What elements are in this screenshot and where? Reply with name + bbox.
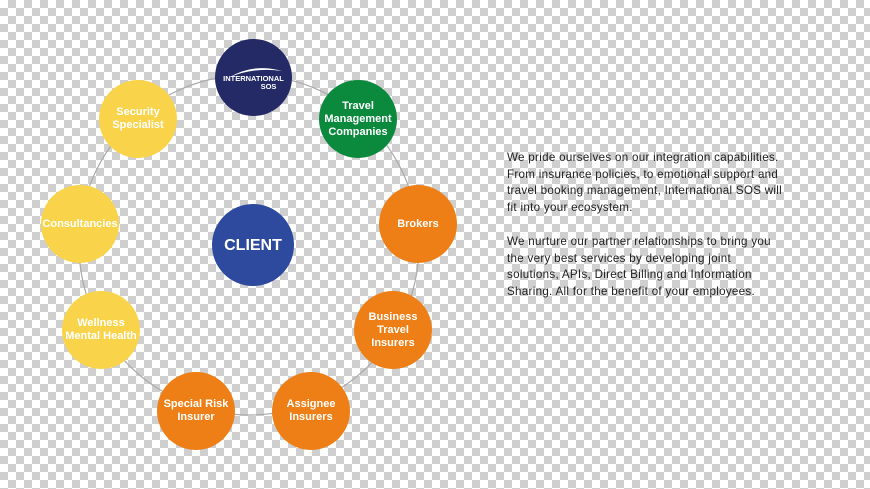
node: Security Specialist bbox=[99, 80, 177, 158]
node: Assignee Insurers: Assignee bbox=[287, 398, 335, 410]
node: International SOS logo: INTERNATIONAL bbox=[223, 74, 284, 82]
text block: description bbox=[507, 151, 782, 298]
node: International SOS logo: SOS bbox=[261, 82, 276, 90]
node: Assignee Insurers bbox=[272, 372, 350, 450]
node: Travel Management Companies bbox=[319, 80, 397, 158]
node: Business Travel Insurers: Travel bbox=[377, 324, 409, 336]
text block: description: solutions, APIs, Direct Billing and Information bbox=[507, 268, 752, 281]
node: Special Risk Insurer bbox=[157, 372, 235, 450]
logo swoosh bbox=[230, 68, 282, 77]
node: Special Risk Insurer: Special Risk bbox=[164, 398, 228, 410]
node: CLIENT bbox=[212, 204, 294, 286]
node: Travel Management Companies: Companies bbox=[328, 126, 388, 138]
text block: description: From insurance policies, to emotional support and bbox=[507, 168, 778, 180]
node: CLIENT: CLIENT bbox=[224, 236, 282, 254]
text block: description: travel booking management, International SOS will bbox=[507, 184, 782, 197]
node: Business Travel Insurers bbox=[354, 291, 432, 369]
node: Wellness Mental Health: Mental Health bbox=[65, 330, 137, 342]
text block: description: fit into your ecosystem. bbox=[507, 200, 633, 214]
node: Consultancies: Consultancies bbox=[42, 218, 118, 230]
node: Brokers bbox=[379, 185, 457, 263]
text block: description: We pride ourselves on our integration capabilities. bbox=[507, 151, 779, 164]
node: Wellness Mental Health: Wellness bbox=[77, 317, 125, 329]
node: Travel Management Companies: Management bbox=[324, 112, 392, 124]
node: Travel Management Companies: Travel bbox=[342, 100, 374, 112]
node: Consultancies bbox=[41, 185, 119, 263]
text block: description: We nurture our partner relationships to bring you bbox=[507, 235, 771, 248]
node: Brokers: Brokers bbox=[397, 218, 439, 230]
node: International SOS logo bbox=[215, 39, 292, 116]
node: Security Specialist: Specialist bbox=[112, 119, 164, 131]
text block: description: the very best services by developing joint bbox=[507, 252, 731, 264]
node: Business Travel Insurers: Business bbox=[369, 310, 417, 322]
node: Special Risk Insurer: Insurer bbox=[177, 411, 215, 423]
node: Security Specialist: Security bbox=[116, 106, 160, 118]
node: Assignee Insurers: Insurers bbox=[289, 411, 333, 423]
node: Business Travel Insurers: Insurers bbox=[371, 336, 415, 348]
node: Wellness Mental Health bbox=[62, 291, 140, 369]
text block: description: Sharing. All for the benefit of your employees. bbox=[507, 284, 755, 298]
